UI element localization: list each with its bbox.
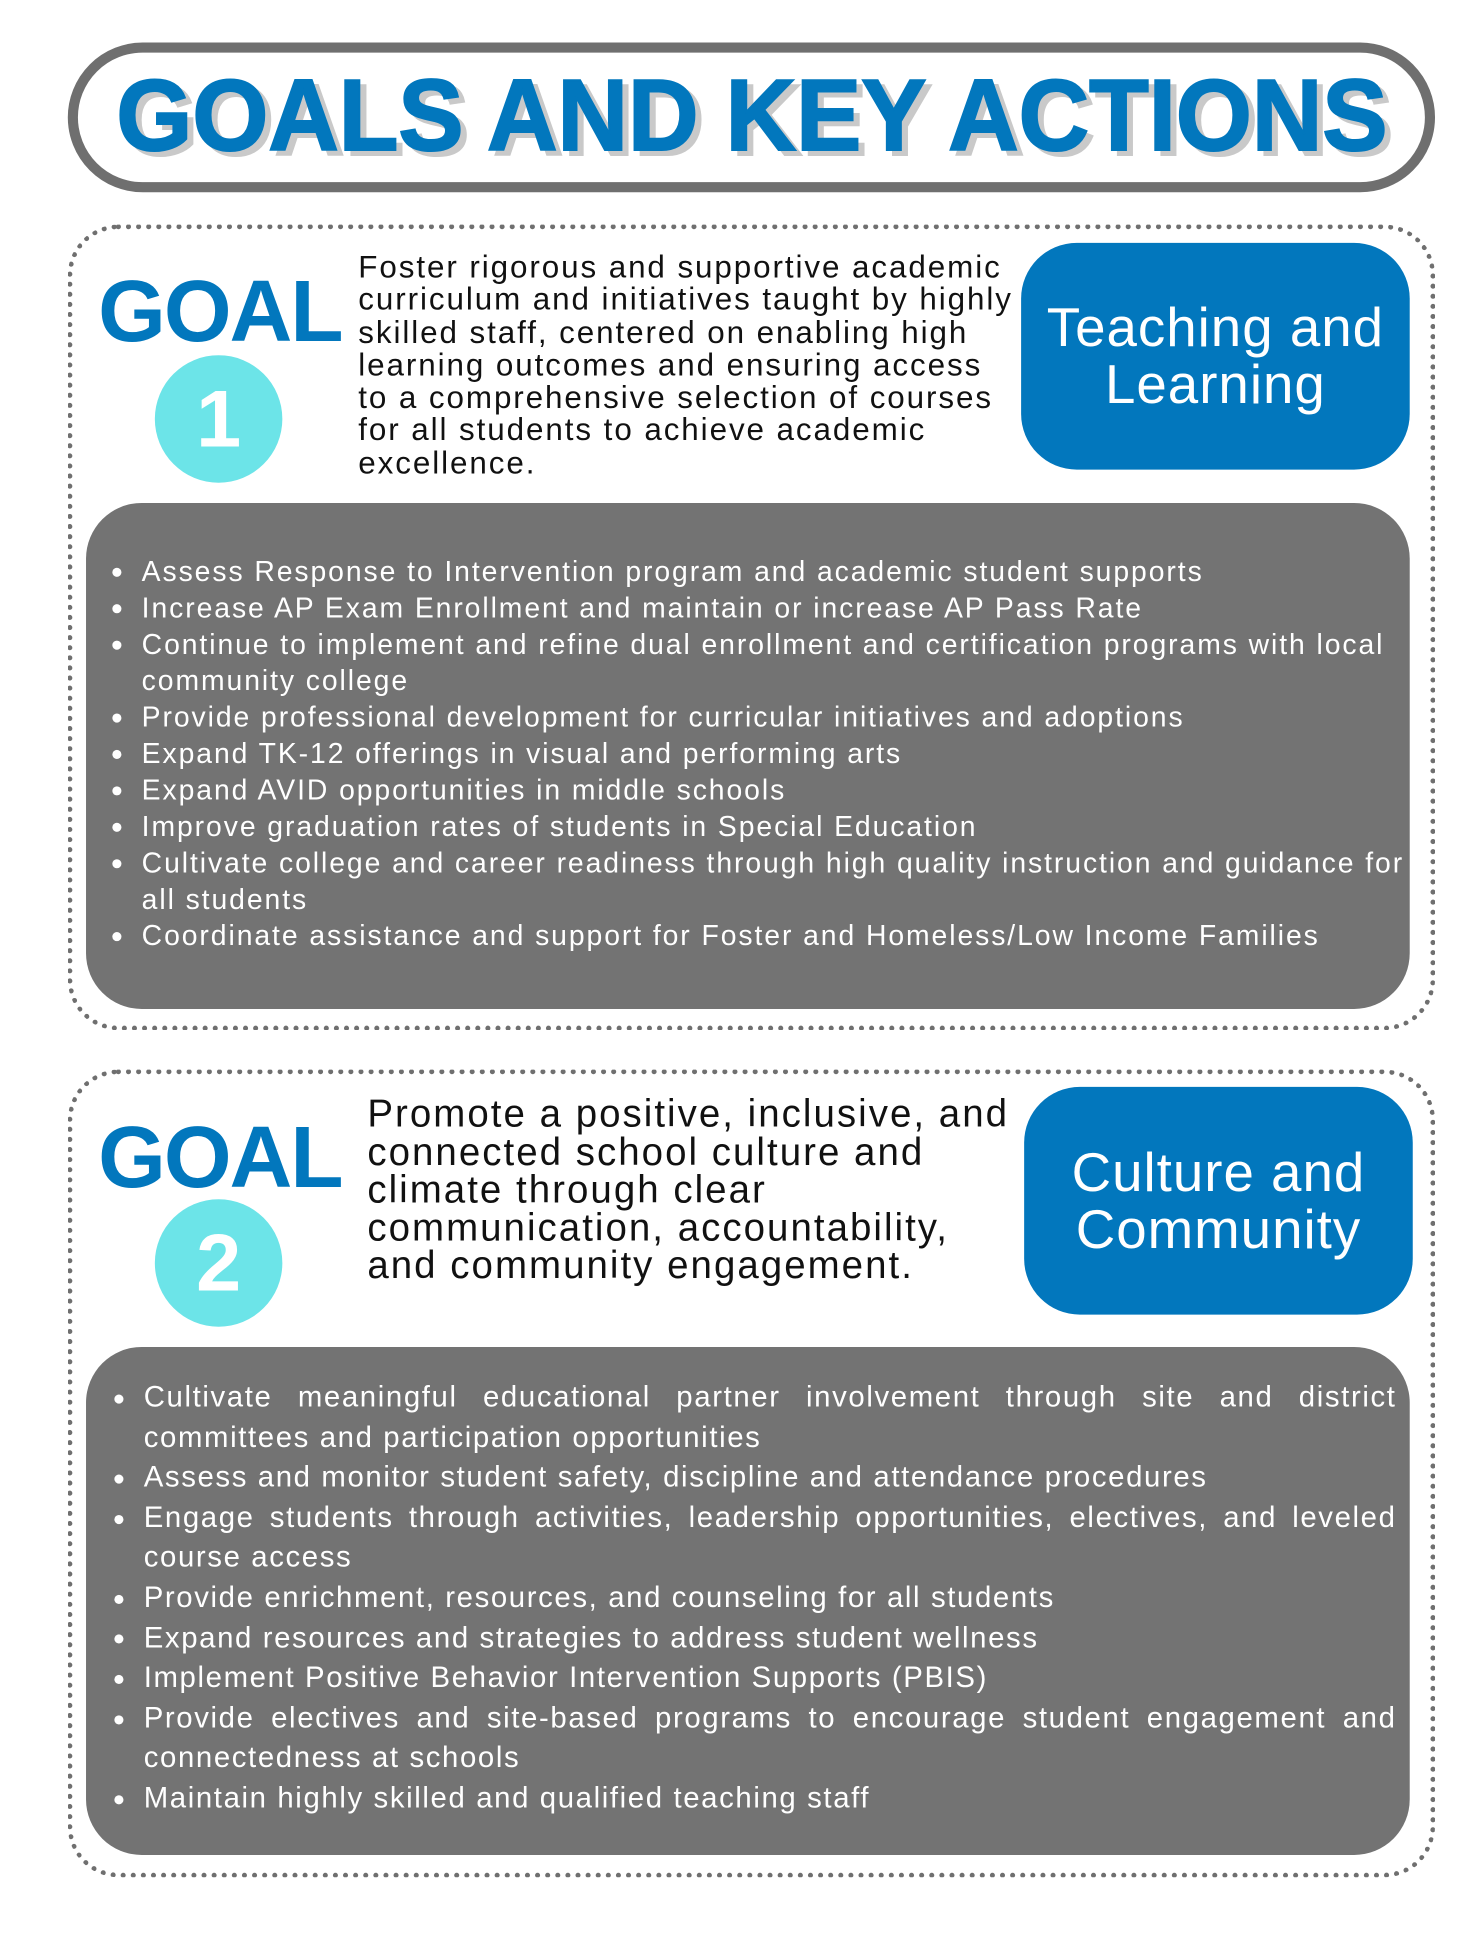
goal 2 key actions: Provide electives and site-based programs to encourage student engagement and <box>144 1702 1397 1734</box>
icon: number 2 circle: 2 <box>196 1217 241 1308</box>
goal 1 key actions: Expand AVID opportunities in middle schools <box>142 774 786 806</box>
panel: goal 1 <box>68 225 1435 1030</box>
goal 1 description: skilled staff, centered on enabling high <box>358 314 968 350</box>
goal 1 key actions: Improve graduation rates of students in Special Education <box>142 811 977 842</box>
goal 2 category: Culture and Community: Community <box>1076 1199 1361 1259</box>
goal 1 description: curriculum and initiatives taught by highly <box>358 282 1013 317</box>
panel: goal 2 <box>68 1070 1435 1877</box>
goal 2 key actions: Assess and monitor student safety, discipline and attendance procedures <box>144 1462 1208 1494</box>
goal 2 heading: GOAL <box>98 1109 341 1206</box>
goal 1 category: Teaching and Learning: Teaching and <box>1047 298 1384 358</box>
icon: number 1 circle <box>155 355 282 483</box>
goal 1 key actions: Continue to implement and refine dual enrollment and certification programs with local <box>142 628 1384 660</box>
goal 2 category: Culture and Community <box>1024 1087 1413 1315</box>
goal 1 key actions: Cultivate college and career readiness through high quality instruction and guidance for <box>142 847 1404 878</box>
goal 1 description <box>358 249 1013 480</box>
goal 2 key actions: Provide enrichment, resources, and counseling for all students <box>144 1582 1055 1614</box>
goal 2 description: connected school culture and <box>367 1131 924 1174</box>
goal 2 description: climate through clear <box>367 1169 767 1212</box>
goal 2 description <box>367 1093 1009 1288</box>
title text: GOALS AND KEY ACTIONS <box>122 64 1394 177</box>
goal 1 description: Foster rigorous and supportive academic <box>358 249 1002 284</box>
goal 1 key actions: all students <box>142 883 308 915</box>
goal 1 category: Teaching and Learning <box>1021 243 1410 470</box>
goal 1 key actions <box>86 503 1410 1009</box>
goal 2 key actions: committees and participation opportunities <box>144 1421 761 1454</box>
title text: GOALS AND KEY ACTIONS <box>116 59 1387 172</box>
goal 1 key actions: Coordinate assistance and support for Foster and Homeless/Low Income Families <box>142 920 1320 951</box>
goal 1 description: learning outcomes and ensuring access <box>358 347 982 382</box>
goal 2 key actions <box>86 1347 1410 1855</box>
goal 1 category: Teaching and Learning: Learning <box>1105 354 1326 415</box>
goal 2 key actions: Cultivate meaningful educational partner involvement through site and district <box>144 1381 1397 1414</box>
goal 2 key actions: Maintain highly skilled and qualified teaching staff <box>144 1782 870 1814</box>
goal 2 description: communication, accountability, <box>367 1207 949 1250</box>
goal 1 description: excellence. <box>358 445 536 480</box>
goal 1 description: to a comprehensive selection of courses <box>358 380 993 415</box>
goal 2 key actions: Engage students through activities, leadership opportunities, electives, and leveled <box>144 1502 1397 1534</box>
goal 2 category: Culture and Community: Culture and <box>1072 1142 1365 1203</box>
goal 2 description: and community engagement. <box>367 1245 914 1288</box>
goal 2 key actions: connectedness at schools <box>144 1742 520 1774</box>
goal 2 key actions: course access <box>144 1542 352 1574</box>
icon: number 2 circle <box>155 1199 282 1327</box>
goal 2 key actions: Implement Positive Behavior Intervention Supports (PBIS) <box>144 1662 988 1694</box>
goal 1 key actions: Increase AP Exam Enrollment and maintain or increase AP Pass Rate <box>142 592 1143 623</box>
goal 1 description: for all students to achieve academic <box>358 412 926 448</box>
title banner <box>68 43 1435 192</box>
goal 1 key actions: Assess Response to Intervention program and academic student supports <box>142 556 1204 587</box>
goal 1 heading: GOAL <box>98 263 341 360</box>
icon: number 1 circle: 1 <box>196 373 241 463</box>
goal 2 key actions: Expand resources and strategies to address student wellness <box>144 1622 1039 1654</box>
goal 1 key actions: Provide professional development for curricular initiatives and adoptions <box>142 701 1185 733</box>
goal 1 key actions: community college <box>142 665 409 696</box>
goal 1 key actions: Expand TK-12 offerings in visual and performing arts <box>142 738 902 769</box>
goal 2 description: Promote a positive, inclusive, and <box>367 1093 1009 1135</box>
